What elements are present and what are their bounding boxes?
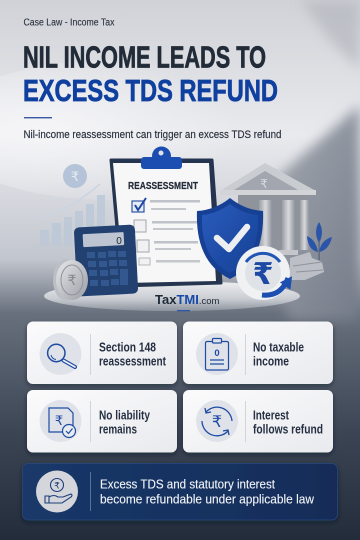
calculator: 0 — [116, 236, 122, 247]
banner text: Excess TDS and statutory interest — [100, 477, 275, 491]
label: follows refund — [253, 422, 323, 436]
label — [99, 340, 167, 368]
label: income — [253, 354, 289, 368]
faded bar chart — [35, 184, 107, 247]
label — [253, 408, 323, 436]
checklist — [132, 198, 200, 265]
logo: TaxTMI.com: TaxTMI.com — [155, 292, 220, 307]
platform — [44, 281, 300, 311]
card: Interest follows refund — [183, 390, 333, 452]
card: Section 148 reassessment — [27, 322, 177, 384]
bank building — [220, 163, 324, 280]
label: No taxable — [253, 340, 304, 354]
banner text — [100, 477, 315, 507]
label: Section 148 — [99, 340, 156, 354]
calculator — [74, 224, 138, 297]
card: No liability remains — [27, 390, 177, 452]
label: Interest — [253, 408, 290, 422]
label: remains — [99, 422, 137, 436]
label — [253, 340, 304, 368]
clipboard — [111, 146, 221, 286]
icon: rupee cycle — [202, 407, 232, 436]
plant — [307, 222, 332, 260]
icon: clipboard zero — [206, 338, 228, 370]
clip — [141, 146, 182, 169]
refund coin: ₹ — [253, 257, 273, 292]
label: reassessment — [99, 354, 167, 368]
banner text: become refundable under applicable law — [100, 493, 315, 507]
icon: hand with rupee — [45, 478, 72, 503]
icon: rupee document check: ₹ — [55, 414, 63, 429]
title: EXCESS TDS REFUND — [23, 74, 278, 108]
label: No liability — [99, 408, 150, 422]
title: NIL INCOME LEADS TO — [23, 40, 266, 74]
bank building: ₹ — [260, 177, 268, 191]
eyebrow: case law label: Case Law - Income Tax — [24, 18, 114, 28]
heading: REASSESSMENT — [128, 180, 198, 192]
icon: magnifier — [48, 344, 75, 367]
faded rupee coin — [63, 164, 87, 188]
title — [23, 40, 278, 108]
shield with check — [197, 198, 263, 279]
coin stack: ₹ — [68, 273, 77, 289]
subtitle: Nil-income reassessment can trigger an excess TDS refund — [24, 129, 282, 141]
coin stack — [53, 259, 88, 301]
faded rupee coin: ₹ — [71, 170, 79, 185]
refund coin — [236, 246, 294, 300]
illustration — [35, 146, 332, 311]
label — [99, 408, 150, 436]
icon: clipboard zero: 0 — [214, 348, 220, 359]
icon: rupee document check — [49, 408, 76, 438]
card: No taxable income — [183, 322, 333, 384]
icon: rupee cycle: ₹ — [212, 412, 222, 431]
icon: hand with rupee: ₹ — [54, 482, 60, 492]
banner: conclusion — [22, 464, 338, 520]
